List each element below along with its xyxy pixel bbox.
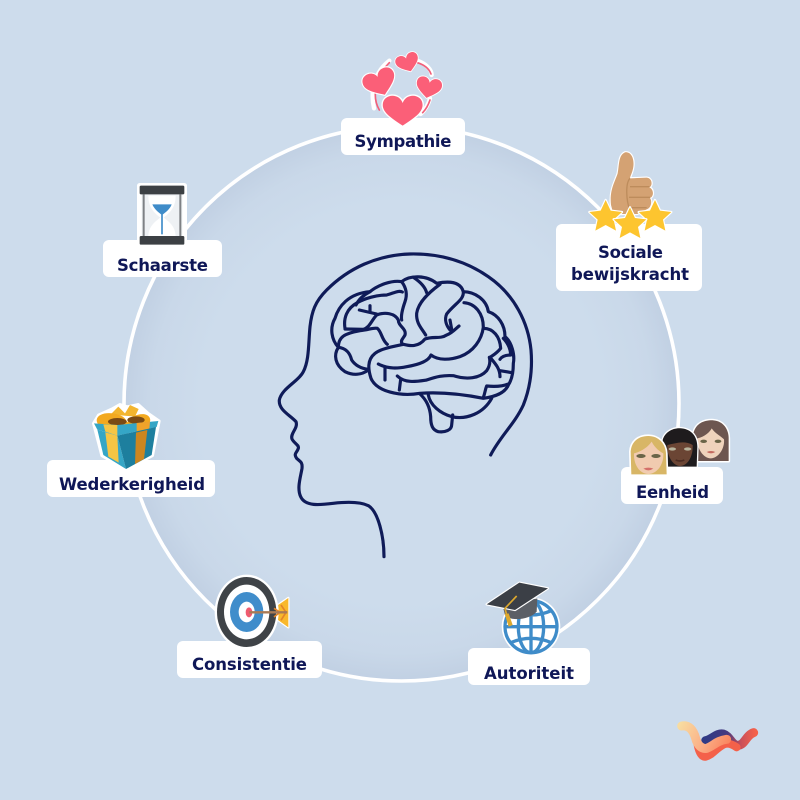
item: Wederkerigheid <box>47 404 215 497</box>
temporal folds <box>380 368 390 380</box>
cerebellum <box>420 394 453 432</box>
icon: target with arrow <box>215 575 288 649</box>
brain outline <box>332 277 514 398</box>
label: Eenheid: Eenheid <box>636 483 709 502</box>
label: Sociale bewijskracht <box>556 224 702 291</box>
label: Sociale bewijskracht: bewijskracht <box>571 265 689 284</box>
item: Consistentie <box>177 575 322 678</box>
label: Consistentie: Consistentie <box>192 655 307 674</box>
face: middle <box>663 428 697 467</box>
label: Sociale bewijskracht: Sociale <box>598 243 663 262</box>
label: Wederkerigheid: Wederkerigheid <box>59 475 205 494</box>
head outline <box>279 254 531 557</box>
item: Schaarste <box>103 183 222 277</box>
item: Autoriteit <box>468 583 590 685</box>
label: Consistentie <box>177 641 322 678</box>
label: Sympathie: Sympathie <box>354 132 452 151</box>
icon: logo wave <box>682 726 754 757</box>
central folds <box>401 282 406 320</box>
label: Schaarste: Schaarste <box>117 256 208 275</box>
item: Sympathie <box>341 50 465 155</box>
icon: head with brain <box>279 254 531 557</box>
face: right <box>693 420 729 461</box>
icon: three faces <box>631 420 729 474</box>
icon: hourglass <box>137 183 187 248</box>
icon: globe with graduation cap <box>487 583 560 656</box>
central ring <box>124 126 679 681</box>
item: Eenheid <box>621 420 729 504</box>
icon: thumbs up with stars <box>589 152 671 238</box>
left lobe <box>336 347 368 374</box>
icon: gift box <box>93 404 159 470</box>
item: Sociale bewijskracht <box>556 152 702 291</box>
label: Autoriteit: Autoriteit <box>484 664 574 683</box>
face: left <box>631 436 667 474</box>
icon: hearts <box>360 50 443 126</box>
label: Wederkerigheid <box>47 460 215 497</box>
